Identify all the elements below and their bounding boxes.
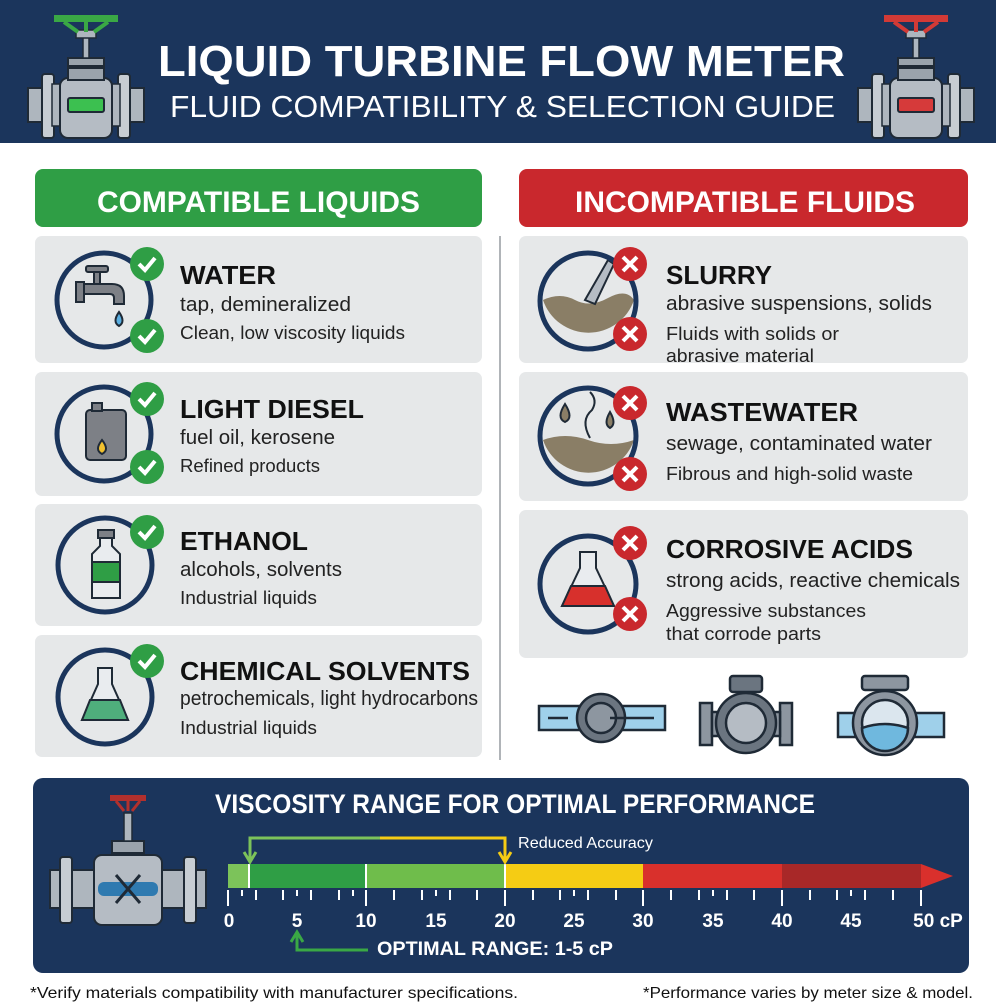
chart: viscosity scale: 35 — [702, 911, 724, 932]
panel: viscosity range — [33, 778, 969, 973]
icon: bottle — [92, 530, 120, 598]
card: wastewater: sewage, contaminated water — [666, 433, 932, 455]
icon: turbine valve — [50, 795, 206, 925]
card: wastewater: WASTEWATER — [666, 397, 858, 427]
chart: viscosity scale: 0 — [224, 911, 234, 932]
card: wastewater: Fibrous and high-solid waste — [666, 464, 913, 484]
card: water: tap, demineralized — [180, 294, 351, 316]
card: wastewater — [519, 372, 968, 501]
heading: compatible: COMPATIBLE LIQUIDS — [97, 186, 420, 219]
card: corrosive acids: CORROSIVE ACIDS — [666, 534, 913, 564]
card: chemical solvents — [35, 635, 482, 757]
panel: compatible liquids — [35, 169, 482, 757]
card: ethanol — [35, 504, 482, 626]
icon: jerrycan — [86, 403, 126, 460]
chart: viscosity scale: 50 cP — [913, 911, 963, 932]
card: corrosive acids: that corrode parts — [666, 624, 821, 644]
card: corrosive acids — [519, 510, 968, 658]
card: slurry — [519, 236, 968, 366]
heading: incompatible — [519, 169, 968, 227]
arrow: reduced accuracy bracket — [244, 835, 653, 862]
icon: left valve — [28, 15, 144, 138]
footnote: right: *Performance varies by meter size & model. — [643, 985, 973, 1002]
card: corrosive acids: Aggressive substances — [666, 601, 866, 621]
title: LIQUID TURBINE FLOW METER — [158, 37, 845, 86]
chart: viscosity scale: 5 — [292, 911, 303, 932]
icon: flask green — [82, 668, 128, 720]
card: water — [35, 236, 482, 363]
card: water: WATER — [180, 260, 276, 290]
chart: viscosity scale: 45 — [840, 911, 862, 932]
card: ethanol: ETHANOL — [180, 526, 308, 556]
heading: compatible — [35, 169, 482, 227]
chart: viscosity scale: 20 — [494, 911, 516, 932]
heading: incompatible: INCOMPATIBLE FLUIDS — [575, 186, 915, 219]
icon: faucet — [76, 266, 124, 326]
icons: flow meter types — [539, 676, 944, 755]
arrow: reduced accuracy bracket: Reduced Accuracy — [518, 835, 653, 852]
card: ethanol: Industrial liquids — [180, 588, 317, 608]
chart: viscosity scale: 40 — [771, 911, 793, 932]
card: chemical solvents: petrochemicals, light hydrocarbons — [180, 688, 478, 710]
card: ethanol: alcohols, solvents — [180, 559, 342, 581]
icon: right valve — [858, 15, 974, 138]
card: light diesel: fuel oil, kerosene — [180, 427, 335, 449]
card: slurry: SLURRY — [666, 260, 772, 290]
chart: viscosity scale: 15 — [425, 911, 447, 932]
card: light diesel: Refined products — [180, 456, 320, 476]
card: corrosive acids: strong acids, reactive chemicals — [666, 570, 960, 592]
card: slurry: abrasive material — [666, 346, 814, 366]
chart: viscosity scale: 10 — [355, 911, 377, 932]
card: light diesel — [35, 372, 482, 496]
heading: viscosity: VISCOSITY RANGE FOR OPTIMAL PERFORMANCE — [215, 789, 815, 819]
chart: viscosity scale: 25 — [563, 911, 585, 932]
chart: viscosity scale: 30 — [632, 911, 654, 932]
chart: viscosity scale — [224, 864, 963, 932]
arrow: optimal range: OPTIMAL RANGE: 1-5 cP — [377, 939, 613, 960]
header banner — [0, 0, 996, 143]
card: chemical solvents: CHEMICAL SOLVENTS — [180, 656, 470, 686]
card: slurry: abrasive suspensions, solids — [666, 293, 932, 315]
card: light diesel: LIGHT DIESEL — [180, 394, 364, 424]
panel: incompatible fluids — [519, 169, 968, 755]
subtitle: FLUID COMPATIBILITY & SELECTION GUIDE — [170, 89, 835, 124]
card: water: Clean, low viscosity liquids — [180, 323, 405, 343]
card: chemical solvents: Industrial liquids — [180, 718, 317, 738]
arrow: optimal range — [291, 932, 613, 960]
footnote: left: *Verify materials compatibility with manufacturer specifications. — [30, 985, 518, 1002]
card: slurry: Fluids with solids or — [666, 324, 839, 344]
